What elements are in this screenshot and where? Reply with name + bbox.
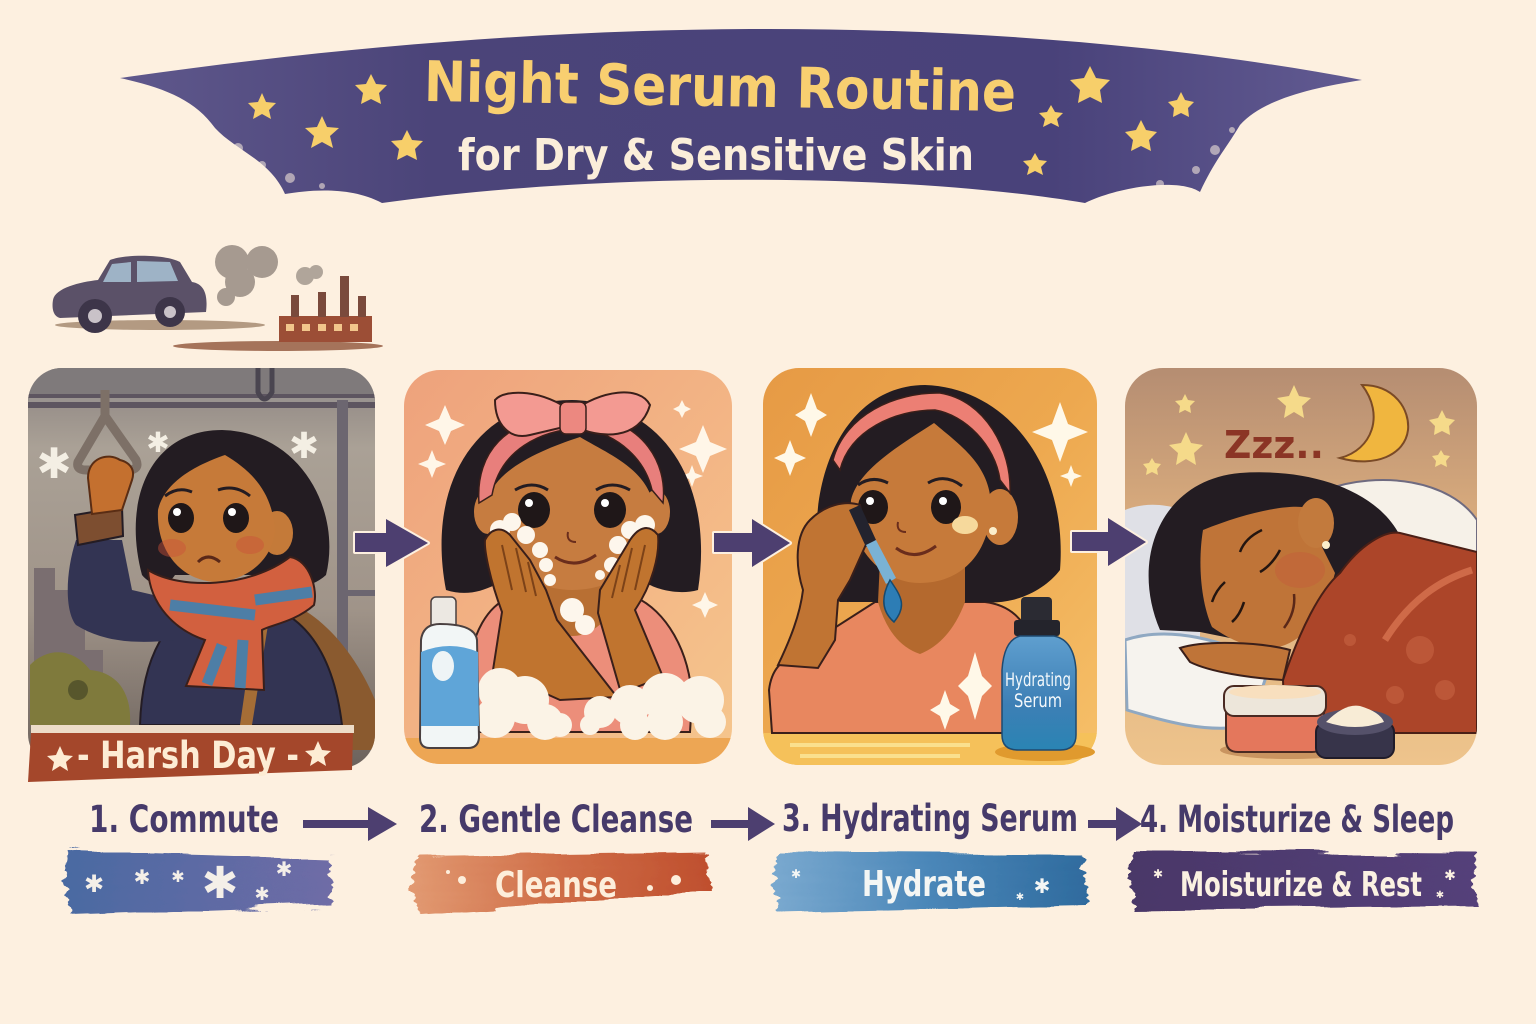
arrow: panel 3 to 4: [1072, 518, 1146, 566]
strip: moisturize and rest: Moisturize & Rest: [1180, 865, 1422, 905]
harsh day banner: [28, 725, 354, 782]
back pillows: [1125, 505, 1200, 650]
headband: [833, 393, 1010, 493]
banner stars: [248, 66, 1194, 175]
hand: [1180, 643, 1290, 680]
ears: [474, 490, 670, 534]
face: [1200, 507, 1335, 648]
hair: [136, 430, 329, 586]
foam on cheeks: [490, 513, 655, 635]
commuter's raised arm: [68, 540, 175, 642]
foam: [475, 668, 726, 740]
hair: [1149, 472, 1402, 640]
strip: moisturize and rest: ✱: [1153, 867, 1163, 881]
strip: hydrate: ✱: [1016, 892, 1024, 903]
serum bottle: Hydrating: [1005, 669, 1071, 691]
moon: [1340, 385, 1408, 461]
icon: car and factory pollution: [53, 245, 383, 351]
headband and bow: [479, 418, 664, 503]
strip: snowflakes: ✱: [84, 870, 104, 898]
strip: hydrate: ✱: [791, 867, 801, 881]
harsh day banner: - Harsh Day -: [77, 734, 299, 777]
ear: [986, 489, 1018, 545]
cleanser bottle: [420, 597, 479, 748]
ear: [268, 511, 293, 555]
arms and hands: [485, 530, 617, 700]
arrow: panel 2 to 3: [714, 519, 790, 567]
strip: snowflakes: ✱: [276, 857, 292, 881]
strip: cleanse: Cleanse: [495, 865, 617, 906]
hand and arm: [778, 503, 868, 668]
cream jar: [1220, 685, 1360, 759]
snowflakes: [39, 432, 317, 478]
shirt: [468, 597, 692, 732]
dropper: [849, 505, 902, 622]
hair: [816, 385, 1061, 602]
bush: [30, 652, 130, 725]
strip: cleanse: [410, 852, 710, 914]
panel: commute: [28, 368, 375, 782]
snowflakes: ✱: [289, 426, 319, 467]
title text: Night Serum Routine: [424, 50, 1017, 125]
strip: hydrate: ✱: [1034, 874, 1050, 898]
face: [851, 423, 991, 583]
arrow: label 2 to 3: [711, 807, 775, 841]
serum bottle: Serum: [1014, 690, 1062, 712]
face: [158, 455, 275, 582]
arrow: label 3 to 4: [1088, 807, 1142, 841]
strip: moisturize and rest: ✱: [1444, 868, 1456, 884]
arrow: label 1 to 2: [303, 807, 397, 841]
neck: [878, 560, 965, 654]
scarf: [148, 557, 315, 690]
coat: [139, 618, 343, 725]
zzz text: Zzz..: [1224, 423, 1324, 467]
step label: gentle cleanse: 2. Gentle Cleanse: [419, 798, 693, 841]
backpack: [294, 612, 375, 750]
snowflakes: ✱: [146, 426, 170, 459]
shirt: [769, 602, 1030, 733]
face: [488, 437, 654, 590]
face details: [858, 490, 888, 524]
strip: hydrate: [774, 852, 1088, 912]
small jar: [1316, 706, 1394, 758]
strip: snowflakes: ✱: [254, 884, 270, 905]
panel: moisturize and sleep: [1125, 368, 1477, 765]
lower pillow: [1125, 634, 1270, 728]
strip: snowflakes: ✱: [171, 867, 185, 886]
strip: hydrate: Hydrate: [862, 864, 986, 905]
face details: [518, 492, 550, 528]
strip: snowflakes: [64, 850, 332, 914]
snowflakes: ✱: [36, 439, 72, 488]
strip: snowflakes: ✱: [202, 858, 238, 909]
hair: [442, 400, 701, 593]
panel: hydrating serum: [763, 368, 1097, 765]
panel: gentle cleanse: [404, 370, 732, 764]
strip: moisturize and rest: ✱: [1436, 890, 1444, 901]
neck: [544, 586, 602, 636]
hand on strap: [88, 457, 133, 514]
strip: snowflakes: ✱: [134, 865, 150, 889]
step label: commute: 1. Commute: [89, 798, 279, 841]
arrow: panel 1 to 2: [355, 519, 428, 567]
hanging strap: [78, 390, 137, 470]
blanket: [1283, 533, 1477, 733]
title banner: [120, 29, 1362, 203]
subtitle text: for Dry & Sensitive Skin: [458, 130, 974, 181]
serum bottle: [995, 597, 1095, 761]
step label: hydrating serum: 3. Hydrating Serum: [782, 797, 1078, 840]
strip: moisturize and rest: [1128, 852, 1476, 910]
